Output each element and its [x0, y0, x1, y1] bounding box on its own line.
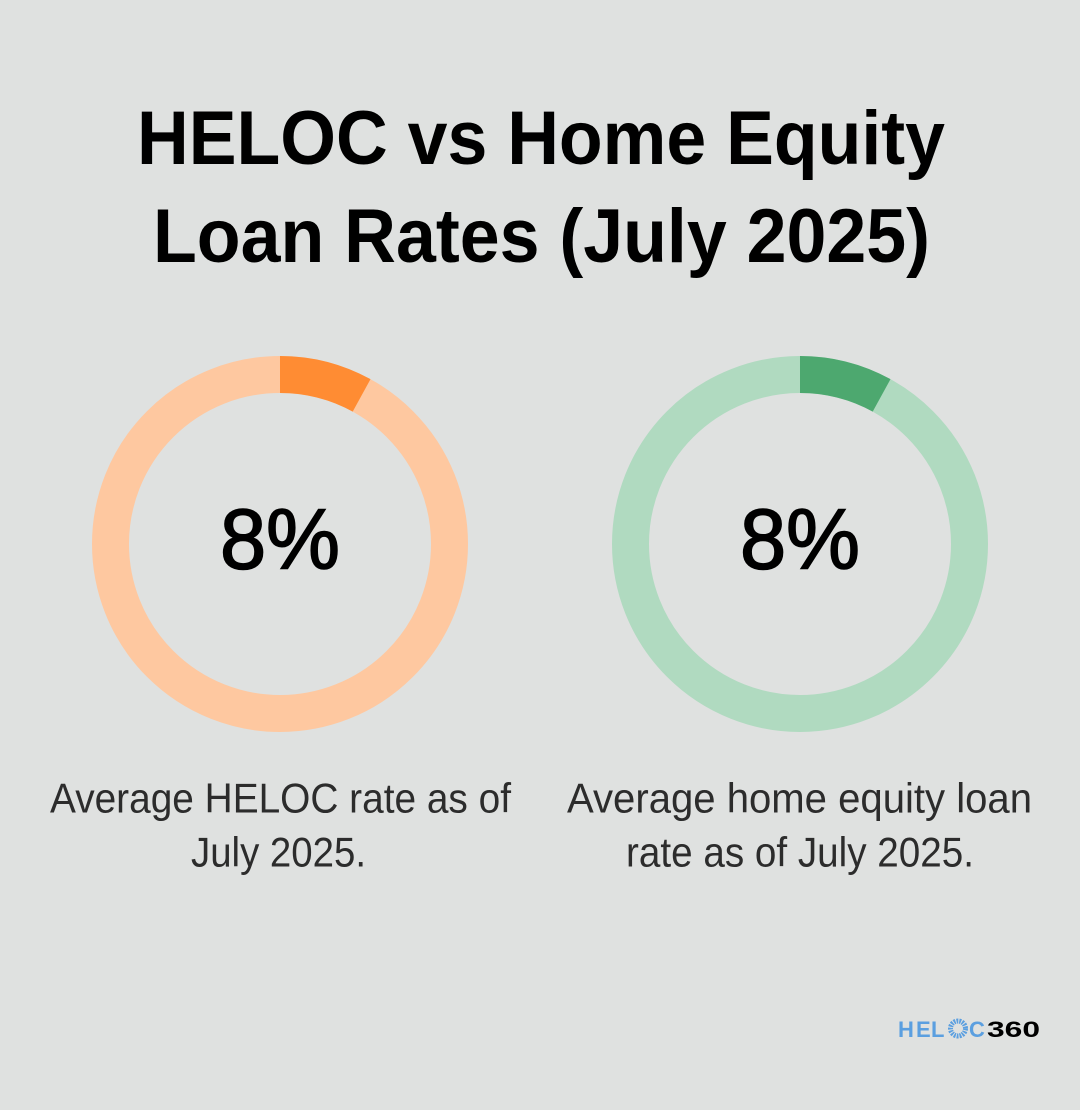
value: home equity loan: 8%: [740, 492, 860, 588]
description: home equity loan: rate as of July 2025.: [626, 828, 974, 876]
panel: home equity loan rate: [567, 374, 1032, 876]
description: HELOC: July 2025.: [191, 828, 366, 876]
donut chart: HELOC 8%: [110, 374, 450, 714]
logo: HELOC360: 360: [987, 1017, 1040, 1042]
logo: HELOC360: HELOC: [898, 1017, 985, 1042]
description: HELOC: Average HELOC rate as of: [50, 774, 511, 822]
value: HELOC: 8%: [220, 492, 340, 588]
description: home equity loan: [567, 774, 1032, 876]
logo: HELOC360: [898, 1017, 1040, 1042]
title: HELOC vs Home Equity: [137, 96, 945, 181]
description: home equity loan: Average home equity loan: [567, 774, 1032, 822]
description: HELOC: [50, 774, 511, 876]
donut chart: home equity loan 8%: [630, 374, 970, 714]
title: Loan Rates (July 2025): [153, 194, 930, 279]
title: [137, 96, 945, 279]
icon: logo swirl: [946, 1017, 970, 1040]
panel: HELOC rate: [50, 374, 511, 876]
